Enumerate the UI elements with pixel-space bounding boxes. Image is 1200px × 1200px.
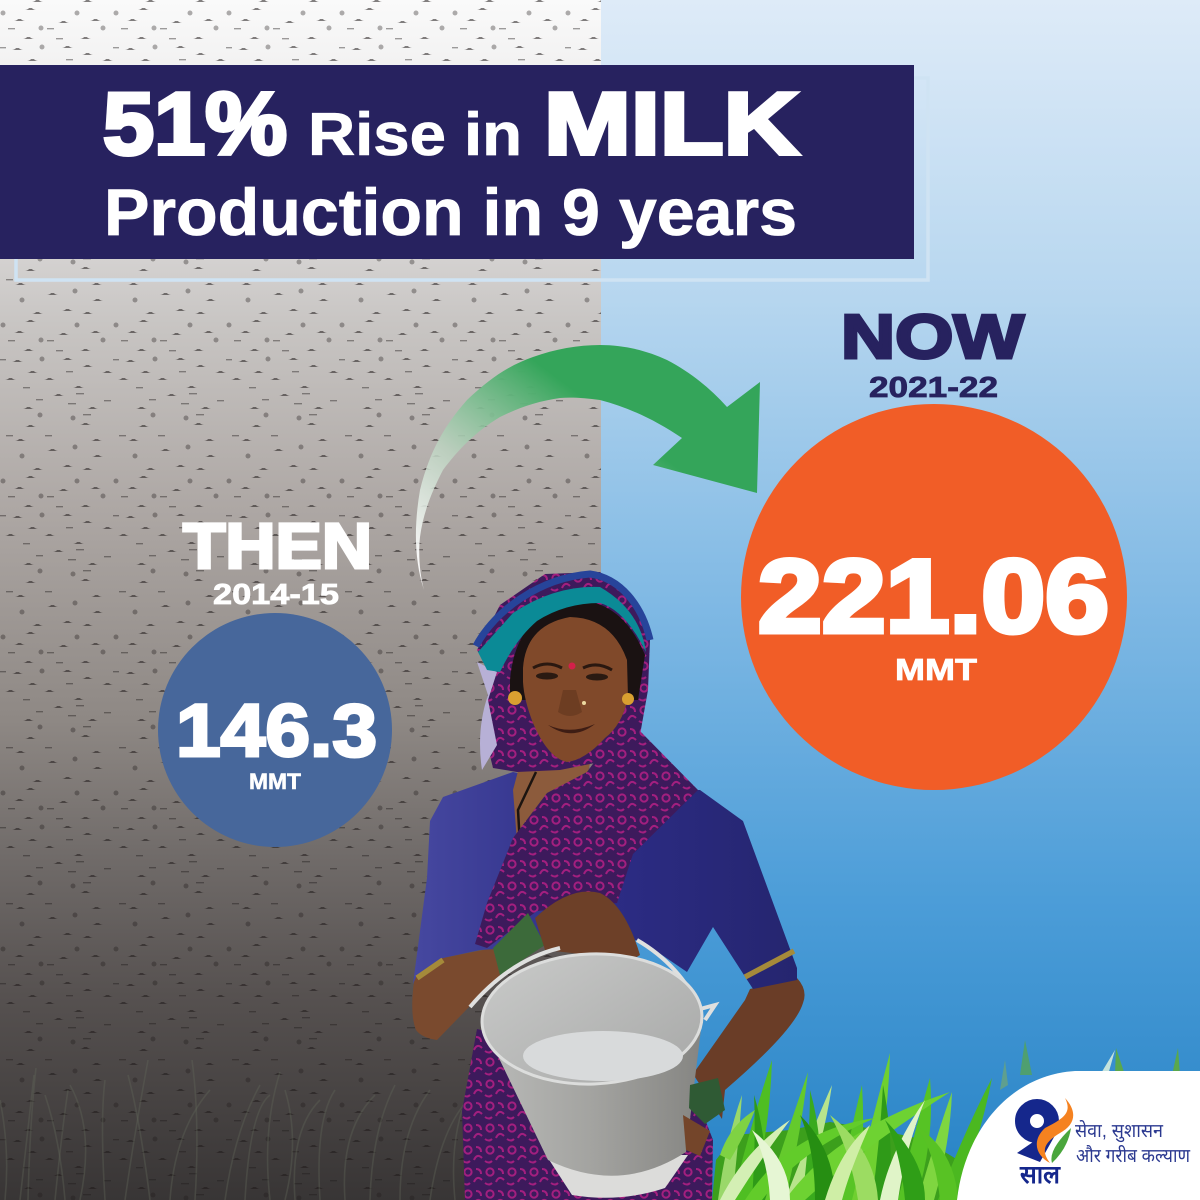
now value circle: 221.06	[758, 539, 1109, 655]
smile	[548, 724, 595, 733]
nose ring	[582, 701, 586, 705]
hair	[510, 600, 645, 700]
neck	[513, 745, 595, 842]
now heading: 2021-22	[869, 372, 998, 404]
title frame outline	[16, 78, 928, 280]
right arm	[693, 978, 805, 1119]
scarf embroidered border	[476, 574, 650, 646]
then value circle: MMT	[249, 769, 302, 794]
logo: saffron swoosh	[1037, 1098, 1073, 1163]
left arm	[412, 948, 500, 1040]
eyes and brows	[533, 664, 612, 680]
title line 1	[103, 74, 799, 173]
bucket body	[483, 1021, 702, 1176]
draped saree	[475, 731, 698, 948]
now heading: NOW	[841, 303, 1025, 372]
bucket rim	[480, 950, 704, 1088]
title line 2: Production in 9 years	[104, 175, 797, 249]
arrow from then to now	[416, 345, 760, 590]
bucket handle	[470, 940, 715, 1020]
now value circle	[741, 404, 1127, 790]
logo: nine numeral	[1017, 1106, 1058, 1162]
then heading: 2014-15	[213, 579, 339, 611]
woman holding milk bucket	[412, 572, 805, 1200]
title line 1: MILK	[544, 74, 799, 173]
now value circle: MMT	[895, 652, 977, 687]
logo panel	[957, 1071, 1200, 1200]
faint grass on left panel	[0, 1060, 468, 1200]
necklace	[518, 772, 536, 845]
blouse	[413, 772, 797, 989]
teal head band	[478, 587, 646, 672]
logo: saal word: साल	[1019, 1161, 1061, 1189]
bucket base ring	[546, 1155, 688, 1198]
logo: slogan: और गरीब कल्याण	[1076, 1144, 1190, 1167]
background: right now panel	[601, 0, 1200, 1200]
background: left then panel	[0, 0, 601, 1200]
head scarf	[477, 572, 650, 772]
earrings	[508, 691, 634, 705]
then value circle	[158, 613, 392, 847]
then heading: THEN	[183, 510, 372, 582]
title line 1: Rise in	[308, 101, 522, 168]
title banner	[0, 65, 914, 259]
lower saree	[462, 1029, 713, 1200]
then heading	[183, 510, 372, 611]
bindi	[568, 662, 576, 670]
face	[523, 617, 628, 762]
hand on handle	[535, 891, 640, 960]
nose	[558, 690, 582, 716]
now heading	[841, 303, 1025, 404]
scarf fringe	[477, 662, 497, 770]
bangles left	[493, 913, 545, 975]
title line 1: 51%	[103, 74, 287, 173]
right hand and bangle	[683, 1078, 725, 1156]
sleeve borders	[417, 951, 794, 978]
then value circle: 146.3	[176, 689, 377, 772]
logo: green swoosh	[1051, 1128, 1071, 1163]
milk	[523, 1031, 683, 1081]
logo: slogan	[1075, 1119, 1190, 1167]
logo: slogan: सेवा, सुशासन	[1075, 1119, 1163, 1143]
grass on right	[712, 1040, 1180, 1200]
